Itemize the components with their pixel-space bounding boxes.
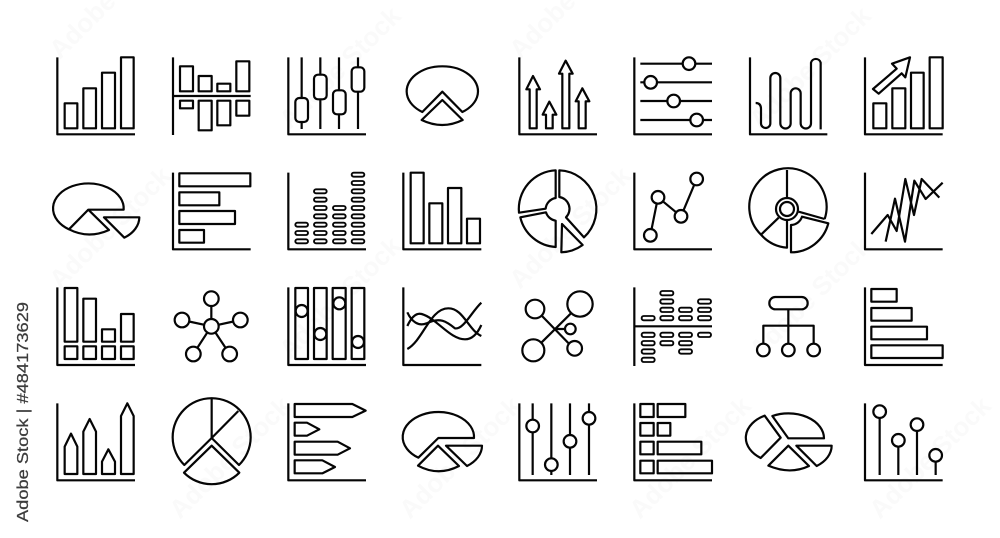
row 2 right icons (519, 168, 943, 252)
icon: pie chart with two lower slices (403, 412, 482, 471)
icon: wave line chart (750, 57, 827, 134)
icon: lollipop chart (865, 403, 943, 480)
icon: pie chart with two slices (53, 183, 139, 238)
watermark pattern: Adobe Stock (743, 230, 877, 364)
icon: candlestick chart (288, 57, 366, 134)
icon: vertical sliders (519, 403, 597, 480)
icon: segmented donut chart (519, 170, 596, 252)
icon: line chart with nodes (634, 173, 712, 249)
icon: volatile line chart (865, 173, 943, 249)
row 3 right icons (522, 287, 943, 366)
icon: wavy multi-line chart (403, 287, 481, 365)
icon: hub network (175, 291, 248, 361)
icon: stacked pill equalizer (288, 173, 366, 249)
icon: rising bar chart (57, 57, 135, 134)
icon: bar chart with growth arrow (865, 57, 943, 134)
watermark pattern: Adobe Stock (393, 390, 527, 524)
icon: diverging pill equalizer (634, 287, 712, 366)
icon: horizontal bar chart (173, 173, 251, 249)
watermark pattern: Adobe Stock (503, 160, 637, 294)
icon: pencil column chart (57, 403, 135, 480)
icon: ring donut chart (749, 168, 828, 252)
row 2 left icons (53, 173, 481, 249)
icon: labelled horizontal bars (634, 403, 712, 480)
watermark pattern: Adobe Stock (623, 390, 757, 524)
icon: ascending horizontal bars (865, 287, 943, 365)
watermark pattern: Adobe Stock (743, 0, 877, 134)
watermark pattern: Adobe Stock (863, 390, 997, 524)
icon: horizontal sliders (634, 57, 712, 134)
row 3 left icons (57, 287, 481, 365)
watermark pattern: Adobe Stock (273, 0, 407, 134)
row 4 left icons (57, 398, 482, 484)
watermark pattern: Adobe Stock (163, 390, 297, 524)
icon: up arrows chart (519, 57, 597, 134)
icon: node cluster diagram (522, 291, 593, 361)
stock credit text: Adobe Stock | #484173629 (15, 302, 32, 522)
icon: organisation tree (757, 297, 820, 356)
icon: column sliders (288, 287, 366, 365)
row 4 right icons (519, 403, 943, 480)
icon: pie chart with bottom slice (407, 66, 478, 125)
watermark pattern: Adobe Stock (273, 230, 407, 364)
icon: bars over square row (57, 287, 135, 365)
row 1 right icons (519, 57, 943, 134)
icon: diverging bar chart (173, 57, 251, 135)
icon: descending bar chart (403, 173, 481, 249)
icon: horizontal arrow bars (288, 403, 366, 480)
icon: circular pie chart (173, 398, 251, 484)
icon: exploded pie chart (746, 413, 832, 470)
row 1 left icons (57, 57, 478, 135)
watermark pattern: Adobe Stock (43, 160, 177, 294)
